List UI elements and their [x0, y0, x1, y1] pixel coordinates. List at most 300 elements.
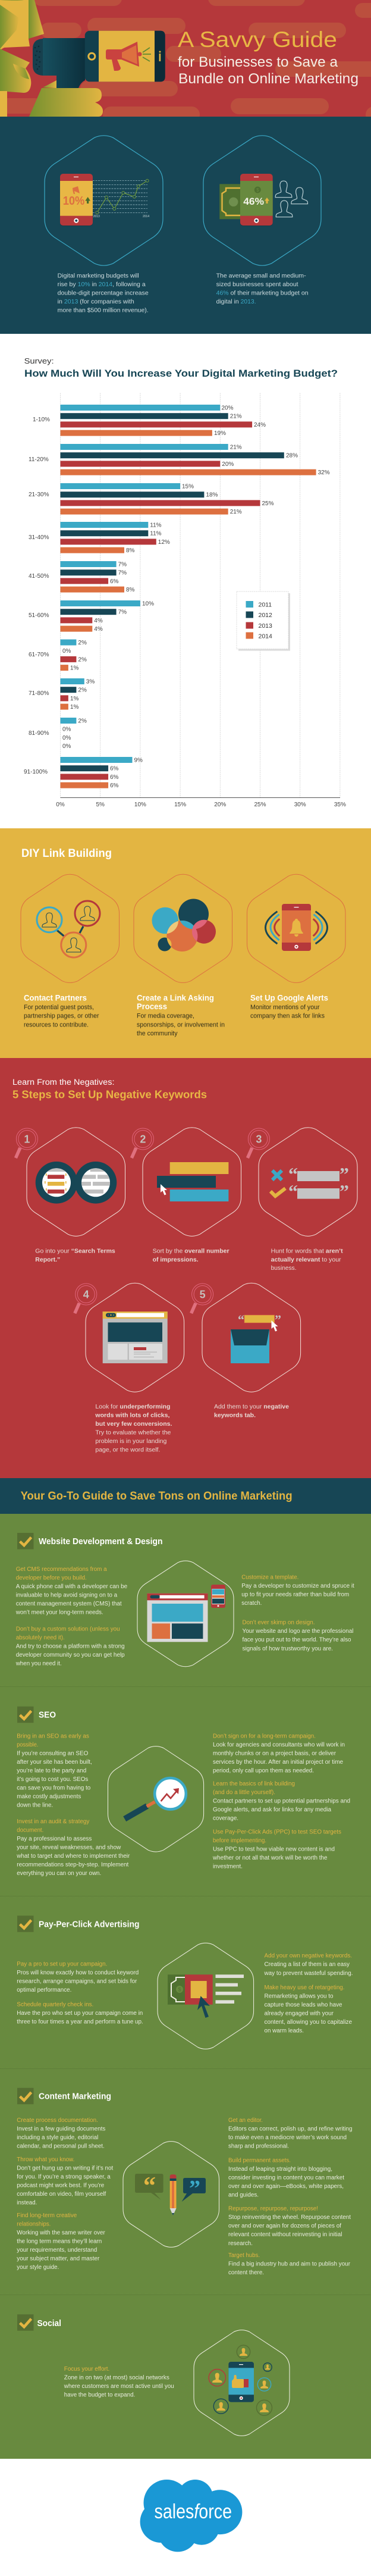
- text: left column: Get CMS recommendations from a: [16, 1566, 107, 1573]
- text: Look for underperforming: [95, 1404, 170, 1410]
- text: right column: Editors can correct, polish up, and refine writing: [228, 2126, 352, 2133]
- text line 2: Report.”: [35, 1257, 60, 1263]
- text: left column: [17, 2117, 114, 2271]
- text: left column: Have the pro who set up your campaign come in: [17, 2010, 143, 2017]
- text: business.: [271, 1265, 297, 1272]
- chart: dashed line graph: 2013: [93, 215, 100, 218]
- text: left column: including a style guide, editorial: [17, 2134, 98, 2141]
- text: left column: make costly adjustments: [17, 1794, 81, 1800]
- bars: 21-30%: 25%: [262, 500, 274, 507]
- bars: 31-40%: 11%: [150, 522, 162, 528]
- bars: 11-20%: 21%: [230, 444, 242, 451]
- text: Contact Partners: [24, 993, 87, 1002]
- text: left column: Invest in an audit & strategy: [17, 1818, 89, 1825]
- text: page, or the word itself.: [95, 1447, 160, 1454]
- bars: 31-40%: [61, 522, 170, 554]
- bar chart: 1-10%: [33, 417, 50, 423]
- text: right column: up to fit your needs rather than build from: [241, 1591, 349, 1598]
- bars: 31-40%: 8%: [126, 547, 135, 554]
- text: right column: whether or not all that work will be worth the: [212, 1855, 328, 1861]
- bars: 21-30%: 21%: [230, 509, 242, 515]
- text: left column: the long term means they’ll learn: [17, 2239, 102, 2245]
- text: [24, 993, 99, 1028]
- text: Hunt for words that aren’t: [271, 1248, 343, 1255]
- text: For media coverage,: [137, 1013, 194, 1020]
- text: Go into your “Search Terms: [35, 1248, 115, 1255]
- text: left column: Working with the same writer over: [17, 2230, 105, 2236]
- icon: phone 46 percent: [240, 174, 273, 226]
- text: left column: everything you can on your own.: [17, 1870, 101, 1877]
- bar chart: 10%: [134, 802, 146, 808]
- stat: 46 percent digital: [203, 136, 321, 305]
- bars: 41-50%: 7%: [118, 570, 127, 577]
- text: Sort by the overall number: [153, 1248, 229, 1255]
- text: right column: monthly chunks or on a project basis, or deliver: [213, 1751, 337, 1757]
- bars: 41-50%: [61, 561, 135, 593]
- text: [64, 2366, 174, 2399]
- icon: phone 10 percent: [60, 174, 93, 226]
- icon: overlapping circles: [152, 899, 216, 951]
- icon: browser page: [103, 1312, 168, 1363]
- text: words with lots of clicks,: [95, 1413, 170, 1419]
- text: right column: Stop reinventing the wheel. Repurpose content: [228, 2214, 351, 2221]
- heading: survey: [24, 356, 338, 379]
- card: google alerts: [247, 874, 345, 1020]
- panel: survey chart: [0, 334, 371, 832]
- hexagon with click icon: [158, 1943, 254, 2049]
- text: left column: Create process documentation.: [17, 2117, 98, 2124]
- text: stat 1: in 2013 (for companies with: [58, 299, 134, 305]
- bar chart: 91-100%: [24, 769, 48, 775]
- text: partnership pages, or other: [24, 1013, 99, 1020]
- text: left column: three to four times a year and perform a tune up.: [17, 2018, 143, 2026]
- icon: sorted bars: [157, 1162, 228, 1201]
- text: right column: [264, 1953, 353, 2034]
- bars: 21-30%: 18%: [206, 492, 218, 499]
- bar chart: 41-50%: [29, 573, 49, 580]
- title: for Businesses to Save a: [178, 54, 338, 70]
- illustration: face and hand: [0, 0, 103, 117]
- text: left column: Pay a professional to assess: [17, 1836, 92, 1842]
- bars: 81-90%: 0%: [62, 727, 71, 733]
- text: left column: your subject matter, and master: [17, 2256, 100, 2262]
- text: right column: Don’t ever skimp on design.: [243, 1620, 315, 1626]
- bars: 1-10%: 21%: [230, 414, 242, 420]
- chart: dashed line graph: [93, 179, 149, 218]
- text: stat 1: double-digit percentage increase: [58, 290, 149, 296]
- text: left column: Invest in a few guiding documents: [17, 2126, 105, 2133]
- text: left column: Pay a pro to set up your campaign.: [17, 1961, 107, 1968]
- text: right column: scratch.: [241, 1600, 262, 1607]
- text: stat 1: [58, 273, 149, 314]
- bar chart: 15%: [174, 802, 186, 808]
- panel: budget stats: [0, 117, 371, 334]
- text: right column: consider investing in content you can market: [228, 2174, 344, 2181]
- text: left column: it’s going to cost you. SEOs: [17, 1776, 88, 1783]
- text: Set Up Google Alerts: [250, 993, 328, 1002]
- bars: 81-90%: [61, 718, 87, 750]
- heading: DIY Link Building: [21, 847, 112, 860]
- text: right column: Google alerts, and ask for links for any media: [213, 1807, 331, 1813]
- text: right column: coverage.: [213, 1816, 238, 1822]
- bars: 81-90%: 2%: [78, 718, 87, 725]
- icon: check: [17, 1533, 33, 1550]
- text: left column: possible.: [17, 1742, 38, 1748]
- text: right column: and guides.: [228, 2192, 259, 2199]
- text: stat 2: [216, 273, 309, 305]
- bars: 61-70%: 1%: [70, 665, 79, 672]
- bar chart: 71-80%: [29, 690, 49, 697]
- section: website development: [15, 1533, 354, 1667]
- text: where customers are most active until you: [64, 2383, 174, 2390]
- text: stat 2: The average small and medium-: [216, 273, 306, 280]
- section: social: [17, 2314, 290, 2436]
- text: left column: instead.: [17, 2200, 37, 2206]
- text: right column: sharp and professional.: [228, 2143, 289, 2150]
- bars: 71-80%: 1%: [70, 696, 79, 702]
- heading: [12, 1078, 207, 1101]
- text: right column: before implementing.: [213, 1838, 266, 1844]
- text: left column: Bring in an SEO as early as: [17, 1733, 89, 1740]
- icon: magnifier number: 1: [24, 1133, 30, 1145]
- icon: magnifier number: 2: [140, 1133, 146, 1145]
- icon: magnifier number: [75, 1284, 97, 1313]
- step 3: [247, 1128, 357, 1272]
- heading: Website Development & Design: [39, 1537, 163, 1547]
- panel: guide: [0, 1514, 371, 2459]
- text: left column: podcast might work best. If you’re: [17, 2183, 105, 2189]
- hexagon with magnifier icon: [108, 1746, 204, 1852]
- text: [153, 1248, 229, 1263]
- text: right column: Use PPC to test how viable new content is and: [213, 1846, 335, 1853]
- legend: 2012: [258, 612, 272, 619]
- icon: phone 10 percent: 10%: [63, 195, 84, 208]
- text: stat 1: Digital marketing budgets will: [58, 273, 139, 280]
- text: Process: [137, 1001, 167, 1011]
- hexagon with social phone icon: [194, 2330, 290, 2436]
- legend: 2014: [258, 633, 272, 640]
- panel: guide title band: [0, 1478, 371, 1514]
- text: left column: [16, 1733, 130, 1877]
- step 4: [75, 1283, 184, 1454]
- text: left column: calendar, and personal pull sheet.: [17, 2143, 105, 2150]
- text: right column: Target hubs.: [228, 2252, 260, 2259]
- heading: survey: How Much Will You Increase Your Digital Marketing Budget?: [24, 368, 338, 379]
- bars: 61-70%: 2%: [78, 640, 87, 646]
- text: left column: you’re late to the party and: [17, 1768, 86, 1774]
- heading: SEO: [39, 1711, 56, 1720]
- icon: phone 46 percent: $: [256, 187, 259, 193]
- bars: 41-50%: 6%: [110, 578, 119, 585]
- bars: 51-60%: 4%: [94, 626, 103, 633]
- text: right column: Repurpose, repurpose, repurpose!: [228, 2206, 318, 2212]
- text: left column: document.: [17, 1827, 43, 1834]
- bars: 31-40%: 11%: [150, 531, 162, 537]
- bars: 51-60%: 7%: [118, 609, 127, 616]
- hexagon with pencil and quotes icon: “: [143, 2173, 156, 2200]
- logo: salesforce cloud: [140, 2480, 242, 2552]
- bars: 41-50%: 7%: [118, 562, 127, 568]
- text: left column: A quick phone call with a developer can be: [16, 1583, 128, 1590]
- bars: 71-80%: 2%: [78, 687, 87, 694]
- step 5: [191, 1283, 301, 1419]
- bars: 81-90%: 0%: [62, 743, 71, 750]
- text: Add them to your negative: [214, 1404, 289, 1410]
- icon: people: [275, 181, 308, 217]
- text: Focus your effort.: [64, 2366, 109, 2372]
- icon: megaphone body: [33, 38, 85, 88]
- text: left column: Don’t get hung up on writing if it’s not: [17, 2165, 114, 2172]
- text: left column: developer before you build.: [16, 1575, 87, 1582]
- step 1: [15, 1128, 125, 1263]
- text: left column: your site, reveal weaknesses, and show: [17, 1845, 121, 1851]
- icon: magnifier number: 4: [83, 1289, 89, 1301]
- bar chart: 0%: [56, 802, 65, 808]
- hexagon with pencil and quotes icon: ”: [189, 2176, 200, 2201]
- text: right column: [212, 1733, 350, 1870]
- bars: 91-100%: [61, 757, 143, 789]
- heading: 5 Steps to Set Up Negative Keywords: [12, 1089, 207, 1101]
- bars: 91-100%: 6%: [110, 766, 119, 772]
- legend: 2011: [258, 601, 272, 608]
- text: left column: developer community so you can get help: [16, 1652, 125, 1658]
- bar chart: 31-40%: [29, 534, 49, 541]
- text: left column: And try to choose a platform with a strong: [16, 1643, 125, 1649]
- icon: magnifier number: [191, 1284, 213, 1313]
- text: left column: Throw what you know.: [17, 2156, 74, 2163]
- bar chart: 11-20%: [29, 456, 49, 463]
- bars: 91-100%: 6%: [110, 774, 119, 781]
- hexagon with click icon: $: [178, 1986, 181, 1992]
- text: right column: Build permanent assets.: [228, 2157, 291, 2164]
- bars: 61-70%: 0%: [62, 648, 71, 655]
- icon: phone alert: [265, 904, 327, 951]
- text: left column: absolutely need it).: [16, 1635, 65, 1641]
- icon: binoculars: [36, 1162, 117, 1204]
- text: sponsorships, or involvement in: [137, 1021, 225, 1028]
- text: keywords tab.: [214, 1413, 256, 1419]
- chart: dashed line graph: 2014: [143, 215, 149, 218]
- text: right column: research.: [228, 2240, 253, 2247]
- bars: 71-80%: [61, 678, 95, 710]
- text: right column: services by the hour. After an initial project or time: [213, 1759, 343, 1766]
- text: right column: Customize a template.: [241, 1574, 298, 1580]
- icon: magnifier number: [131, 1128, 153, 1158]
- text: right column: Find a big industry hub and aim to publish your: [228, 2261, 351, 2267]
- bars: 1-10%: 24%: [254, 422, 266, 428]
- bar chart: 21-30%: [29, 492, 49, 498]
- bars: 51-60%: 4%: [94, 618, 103, 624]
- text: right column: relevant content without reinvesting in initial: [228, 2231, 342, 2238]
- icon: envelope: [231, 1312, 281, 1363]
- bars: 21-30%: 15%: [182, 483, 194, 490]
- text: [214, 1404, 289, 1419]
- hexagon with browser icon: [137, 1561, 234, 1667]
- text: stat 2: sized businesses spent about: [216, 281, 298, 288]
- text: the community: [137, 1030, 178, 1037]
- text: right column: Remarketing allows you to: [264, 1993, 334, 1999]
- bars: 91-100%: 6%: [110, 782, 119, 789]
- text: [137, 993, 225, 1037]
- icon: check: [17, 1707, 33, 1723]
- bars: 11-20%: 28%: [286, 453, 298, 459]
- bars: 11-20%: 20%: [222, 461, 234, 468]
- panel: footer: [0, 2459, 371, 2576]
- icon: cross and check quotes: “: [288, 1181, 298, 1202]
- bar chart: 5%: [96, 802, 105, 808]
- text: left column: Don’t buy a custom solution (unless you: [16, 1626, 120, 1632]
- legend: [237, 591, 290, 651]
- icon: check: [17, 1915, 33, 1932]
- text: left column: can save you from having to: [17, 1785, 91, 1792]
- text: left column: what to target and where to implement their: [16, 1853, 130, 1860]
- text: left column: relationships.: [17, 2221, 51, 2228]
- text: right column: Get an editor.: [228, 2117, 263, 2124]
- text: right column: Pay a developer to customize and spruce it: [241, 1583, 354, 1589]
- icon: magnifier number: [247, 1128, 269, 1158]
- text: company then ask for links: [250, 1013, 325, 1020]
- bars: 61-70%: 2%: [78, 656, 87, 663]
- icon: cross and check quotes: [271, 1163, 349, 1202]
- bars: 11-20%: 32%: [318, 469, 330, 476]
- text: stat 1: more than $500 million revenue).: [58, 307, 149, 314]
- icon: magnifier number: 5: [200, 1289, 206, 1301]
- bar chart: 25%: [254, 802, 266, 808]
- icon: cross and check quotes: ”: [339, 1163, 349, 1185]
- heading: Content Marketing: [39, 2092, 111, 2102]
- text: right column: (and do a little yourself).: [213, 1789, 275, 1796]
- title: A Savvy Guide: [178, 27, 337, 52]
- text: right column: Your website and logo are the professional: [243, 1628, 353, 1635]
- icon: magnifier number: [15, 1128, 37, 1158]
- text: right column: Make heavy use of retargeting.: [264, 1985, 345, 1991]
- bars: 1-10%: [61, 405, 266, 437]
- icon: check: [17, 2088, 33, 2104]
- text: right column: [241, 1574, 354, 1652]
- bars: 71-80%: 1%: [70, 704, 79, 710]
- bars: 1-10%: 19%: [214, 430, 226, 437]
- text: stat 2: digital in 2013.: [216, 299, 256, 305]
- text: left column: [15, 1566, 128, 1667]
- bars: 61-70%: [61, 639, 87, 672]
- text: left column: after your site has been built,: [17, 1759, 92, 1766]
- bars: 31-40%: 12%: [158, 539, 170, 546]
- bars: 71-80%: 3%: [86, 678, 95, 686]
- panel: DIY link building: [0, 828, 371, 1058]
- text: [271, 1248, 343, 1272]
- text: Monitor mentions of your: [250, 1004, 320, 1011]
- icon: phone with megaphone: [85, 31, 165, 82]
- bars: 11-20%: [61, 444, 330, 476]
- icon: envelope: “: [238, 1312, 244, 1327]
- text: of impressions.: [153, 1257, 199, 1263]
- text: left column: your style guide.: [17, 2264, 59, 2271]
- icon: envelope: ”: [275, 1312, 281, 1327]
- bar chart: 20%: [214, 802, 226, 808]
- bar chart: 51-60%: [29, 612, 49, 619]
- stat: 10 percent rise: [45, 136, 163, 314]
- text: left column: Find long-term creative: [17, 2212, 77, 2219]
- text: right column: capture those leads who have: [264, 2002, 342, 2008]
- text: right column: Contact partners to set up potential partnerships and: [213, 1798, 350, 1805]
- text: right column: Learn the basics of link building: [213, 1780, 295, 1787]
- heading: Your Go-To Guide to Save Tons on Online Marketing: [21, 1490, 293, 1503]
- text: left column: when you need it.: [15, 1660, 62, 1667]
- text: stat 2: 46% of their marketing budget on: [216, 290, 309, 296]
- text: right column: over and over again—eBooks, white papers,: [228, 2183, 344, 2190]
- icon: money: [219, 184, 243, 219]
- panel: negative keywords: [0, 1058, 371, 1478]
- text: right column: Instead of leaping straight into blogging,: [228, 2166, 332, 2173]
- text: [250, 993, 328, 1020]
- text: left column: Pros will know exactly how to conduct keyword: [17, 1970, 139, 1976]
- icon: phone 46 percent: 46%: [243, 196, 264, 207]
- bars: 1-10%: 20%: [221, 405, 234, 412]
- text: left column: If you’re consulting an SEO: [17, 1751, 89, 1757]
- text: left column: for you. If you’re a strong speaker, a: [17, 2174, 111, 2180]
- text: left column: your requirements, understand: [17, 2247, 97, 2253]
- text: left column: down the line.: [17, 1802, 53, 1809]
- text: but very few conversions.: [95, 1421, 172, 1428]
- step 2: [131, 1128, 241, 1263]
- text: right column: Add your own negative keywords.: [264, 1953, 352, 1960]
- icon: cross and check quotes: “: [288, 1163, 298, 1185]
- card: contact partners: [21, 874, 119, 1028]
- text: right column: already engaged with your: [264, 2011, 334, 2017]
- text: left column: recommendations step-by-step. Implement: [17, 1862, 129, 1868]
- text: left column: comfortable on video, film yourself: [17, 2191, 106, 2198]
- text: right column: on warm leads.: [264, 2028, 304, 2034]
- panel: header: [0, 0, 371, 123]
- bar chart: 30%: [294, 802, 306, 808]
- text: left column: [17, 1961, 143, 2026]
- hexagon with pencil and quotes icon: [123, 2142, 219, 2247]
- logo: salesforce cloud: salesforce: [155, 2500, 232, 2523]
- text: left column: content management system (CMS) that: [16, 1601, 122, 1607]
- text: left column: invaluable to help avoid signing on to a: [16, 1592, 118, 1599]
- icon: cross and check quotes: ”: [339, 1181, 349, 1202]
- heading: Pay-Per-Click Advertising: [39, 1920, 139, 1929]
- icon: connected people: [37, 901, 100, 957]
- text: right column: period, only call upon them as needed.: [213, 1768, 314, 1774]
- text: right column: signals of how trustworthy you are.: [243, 1645, 333, 1652]
- title: Bundle on Online Marketing: [178, 71, 359, 87]
- legend: 2013: [258, 622, 272, 630]
- text: left column: optimal performance.: [17, 1987, 71, 1993]
- text: For potential guest posts,: [24, 1004, 94, 1011]
- text: right column: content there.: [228, 2270, 264, 2276]
- text: Zone in on two (at most) social networks: [64, 2375, 169, 2381]
- text: left column: won’t meet your long-term needs.: [15, 1610, 103, 1616]
- bars: 21-30%: [61, 483, 274, 515]
- text: right column: to make even a mediocre writer’s work sound: [228, 2134, 347, 2141]
- icon: check: [17, 2314, 33, 2331]
- section: SEO: [16, 1707, 350, 1877]
- text: problem is in your landing: [95, 1438, 166, 1445]
- text: right column: way to prevent wasteful spending.: [264, 1970, 353, 1977]
- text: left column: research, arrange campaigns, and set bids for: [17, 1979, 137, 1985]
- text: resources to contribute.: [24, 1021, 89, 1028]
- text: [95, 1404, 172, 1454]
- card: link asking process: [134, 874, 232, 1037]
- bar chart: 61-70%: [29, 652, 49, 658]
- bars: 91-100%: 9%: [134, 757, 143, 764]
- text: right column: Creating a list of them is an easy: [264, 1961, 350, 1968]
- text: right column: [228, 2117, 352, 2276]
- section: pay-per-click: [17, 1915, 353, 2049]
- text: right column: face you put out to the world. They’re also: [243, 1637, 351, 1644]
- text: right column: over and over again for dozens of pieces of: [228, 2223, 341, 2230]
